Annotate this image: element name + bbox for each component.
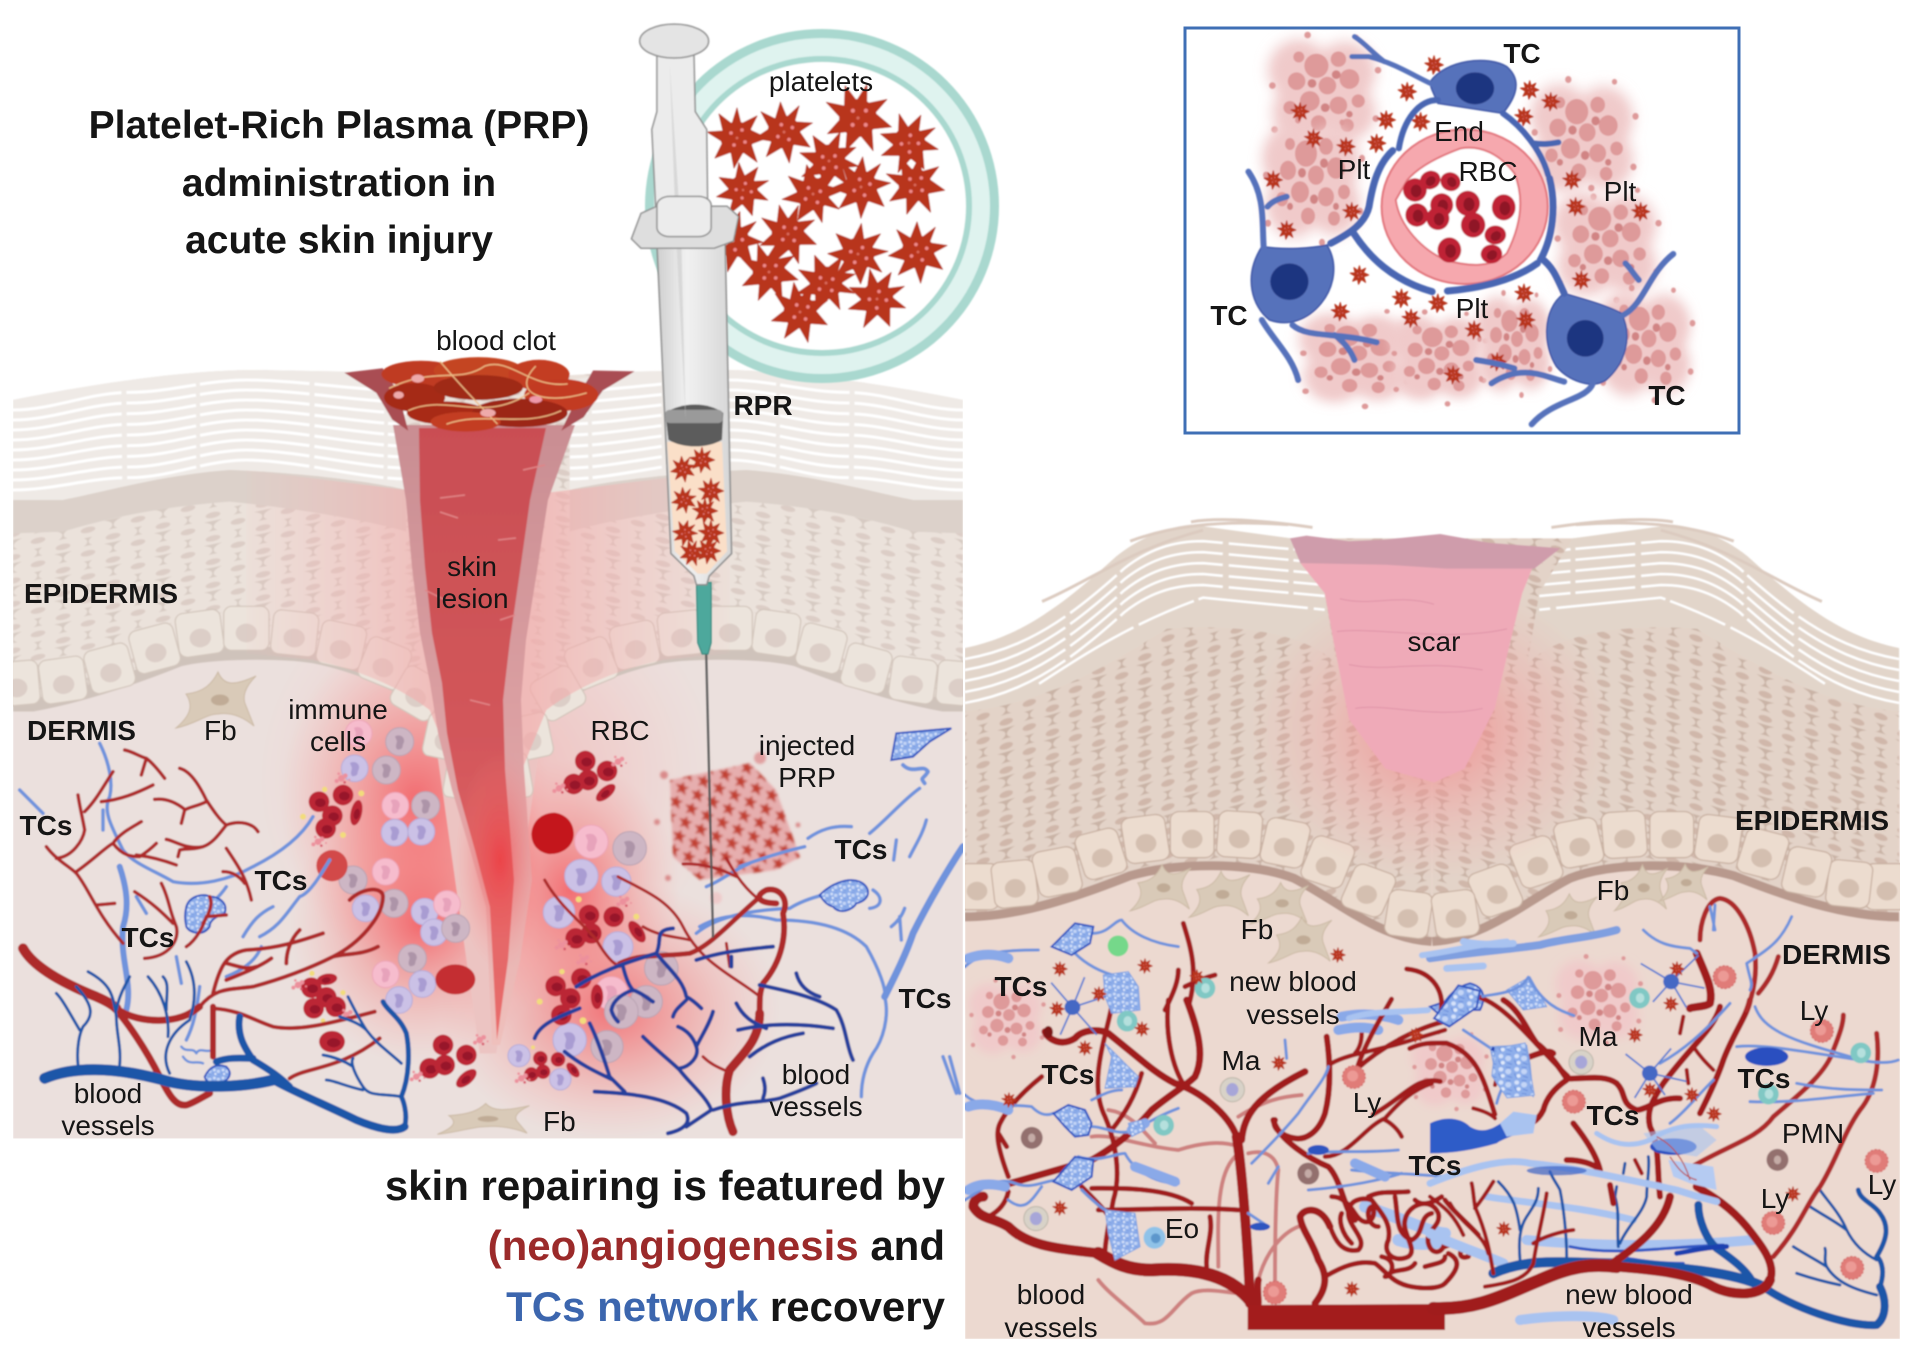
TCs filaments right [696, 728, 963, 1097]
immune cells left [339, 720, 470, 1013]
label RBC: RBC [1458, 156, 1518, 187]
fibroblasts [1130, 864, 1708, 963]
mid vessels [1355, 969, 1568, 1114]
conclusion text: TCs network [506, 1283, 759, 1330]
right trunk vessel [1430, 1000, 1878, 1308]
label new blood vessels bottom: vessels [1582, 1312, 1676, 1343]
stopper [665, 405, 723, 446]
label blood vessels right: vessels [769, 1091, 863, 1122]
platelets [691, 76, 960, 352]
tangled capillaries [1300, 1192, 1478, 1303]
pale TC bands right [1430, 1197, 1753, 1320]
TCs network left [965, 920, 1445, 1260]
title: acute skin injury [185, 219, 493, 262]
conclusion text: recovery [758, 1283, 946, 1330]
label TCs a: TCs [995, 971, 1047, 1002]
epidermis right [1430, 520, 1909, 942]
scar glow [1285, 636, 1578, 850]
plunger rod [652, 54, 708, 232]
label TCs 5: TCs [899, 983, 951, 1014]
needle [706, 647, 713, 937]
title: administration in [182, 162, 496, 205]
vessel ring [1382, 129, 1548, 284]
label Ma left: Ma [1222, 1045, 1261, 1076]
label TCs 4: TCs [835, 834, 887, 865]
flange [631, 206, 739, 248]
label injected PRP: injected [759, 730, 855, 761]
immune cells right [508, 825, 678, 1090]
red blood cells left [291, 772, 489, 1091]
label TCs c: TCs [1409, 1150, 1461, 1181]
label TC right: TC [1648, 380, 1686, 411]
label blood vessels: blood [1017, 1279, 1085, 1310]
label injected PRP: PRP [778, 762, 836, 793]
dermis background [965, 730, 1900, 1339]
title: Platelet-Rich Plasma (PRP) [89, 104, 589, 147]
platelets in syringe [666, 447, 724, 569]
fading vessels [1092, 1095, 1302, 1324]
label skin lesion: lesion [435, 583, 509, 614]
label TCs b: TCs [1042, 1059, 1094, 1090]
label blood clot: blood clot [436, 325, 556, 356]
label TCs 3: TCs [122, 922, 174, 953]
label Ma right: Ma [1579, 1021, 1618, 1052]
pale TCs bands behind tangle [1365, 1207, 1445, 1244]
label Fb top: Fb [204, 715, 237, 746]
label RPR: RPR [733, 390, 793, 421]
epidermis right [483, 370, 984, 1053]
label TC top: TC [1503, 38, 1541, 69]
label Plt left: Plt [1338, 154, 1371, 185]
label new blood vessels top: new blood [1229, 966, 1357, 997]
label platelets: platelets [769, 66, 873, 97]
label PMN: PMN [1782, 1118, 1844, 1149]
injected PRP cloud [654, 752, 800, 904]
scar [1290, 534, 1561, 782]
plunger head [640, 24, 709, 58]
label Ly 2: Ly [1800, 995, 1828, 1026]
label immune cells: cells [310, 726, 366, 757]
telocyte left [1248, 151, 1432, 380]
fibroblast top [176, 672, 256, 728]
Eo-region small TC [1128, 1120, 1145, 1137]
label EPIDERMIS right: EPIDERMIS [1735, 805, 1889, 836]
label TCs d: TCs [1587, 1100, 1639, 1131]
TCs filaments left [20, 743, 330, 1084]
red vessels left [23, 750, 383, 1105]
blood clot [344, 357, 635, 432]
label Ly 1: Ly [1353, 1087, 1381, 1118]
inset frame [1185, 28, 1739, 433]
label Fb bottom: Fb [543, 1106, 576, 1137]
small platelets [1002, 948, 1800, 1296]
panel: platelets circle [645, 29, 999, 383]
label skin lesion: skin [447, 551, 497, 582]
inflammation glow [290, 671, 756, 1122]
labels: right panel [995, 626, 1896, 1343]
label TCs 1: TCs [20, 810, 72, 841]
label Plt right: Plt [1604, 176, 1637, 207]
neuron-like cells [1051, 955, 1705, 1098]
label Fb right: Fb [1597, 875, 1629, 906]
blue vein [1493, 1157, 1886, 1325]
mid TC bodies [1349, 942, 1574, 1098]
small platelets [1264, 56, 1650, 384]
syringe [631, 24, 739, 937]
panel: inset telocyte around vessel [1185, 28, 1739, 433]
label RBC: RBC [590, 715, 650, 746]
needle hub [696, 583, 711, 654]
label blood vessels left: vessels [61, 1110, 155, 1141]
conclusion text: and [859, 1222, 945, 1269]
blue vessels left [45, 962, 408, 1130]
label DERMIS left: DERMIS [27, 715, 136, 746]
panel: acute skin injury [0, 357, 984, 1140]
label Eo: Eo [1165, 1213, 1199, 1244]
label new blood vessels top: vessels [1246, 999, 1340, 1030]
blue vessels right [535, 928, 853, 1133]
label blood vessels: vessels [1004, 1312, 1098, 1343]
immune cells [1021, 936, 1888, 1304]
label immune cells: immune [288, 694, 388, 725]
label blood vessels right: blood [782, 1059, 850, 1090]
panel: repaired skin [955, 520, 1909, 1339]
TCs network right [1430, 1000, 1898, 1202]
red blood cells [1403, 167, 1516, 267]
label End: End [1434, 116, 1484, 147]
conclusion text: (neo)angiogenesis [488, 1222, 859, 1269]
label DERMIS right: DERMIS [1782, 939, 1891, 970]
label Fb left: Fb [1241, 914, 1273, 945]
label Ly 3: Ly [1761, 1183, 1789, 1214]
label TCs e: TCs [1738, 1063, 1790, 1094]
platelet clusters [968, 954, 1643, 1111]
label Ly 4: Ly [1868, 1169, 1896, 1200]
label TCs 2: TCs [255, 865, 307, 896]
telocyte top [1352, 37, 1558, 175]
centre vessels [1273, 1030, 1445, 1220]
labels: inset [1210, 38, 1686, 411]
label Plt bottom: Plt [1456, 293, 1489, 324]
epidermis left [955, 520, 1434, 942]
red vessel bar [1248, 1304, 1452, 1330]
epidermis left [0, 370, 493, 1053]
upper right vessels [1430, 898, 1792, 1010]
red vessels right [545, 858, 785, 1132]
dermis background [13, 640, 963, 1139]
label scar: scar [1408, 626, 1460, 657]
label new blood vessels bottom: new blood [1565, 1279, 1693, 1310]
label blood vessels left: blood [74, 1078, 142, 1109]
skin lesion channel [393, 425, 575, 1045]
barrel [657, 243, 732, 585]
telocyte right [1447, 178, 1673, 424]
PRP liquid [667, 442, 727, 574]
red blood cells right [515, 751, 649, 1084]
left vessels [973, 923, 1305, 1312]
label TC left: TC [1210, 300, 1248, 331]
platelet aggregates [1262, 32, 1695, 409]
label EPIDERMIS left: EPIDERMIS [24, 578, 178, 609]
fibroblast bottom [437, 1104, 529, 1134]
labels: left panel [20, 66, 951, 1141]
conclusion text: skin repairing is featured by [385, 1162, 946, 1209]
